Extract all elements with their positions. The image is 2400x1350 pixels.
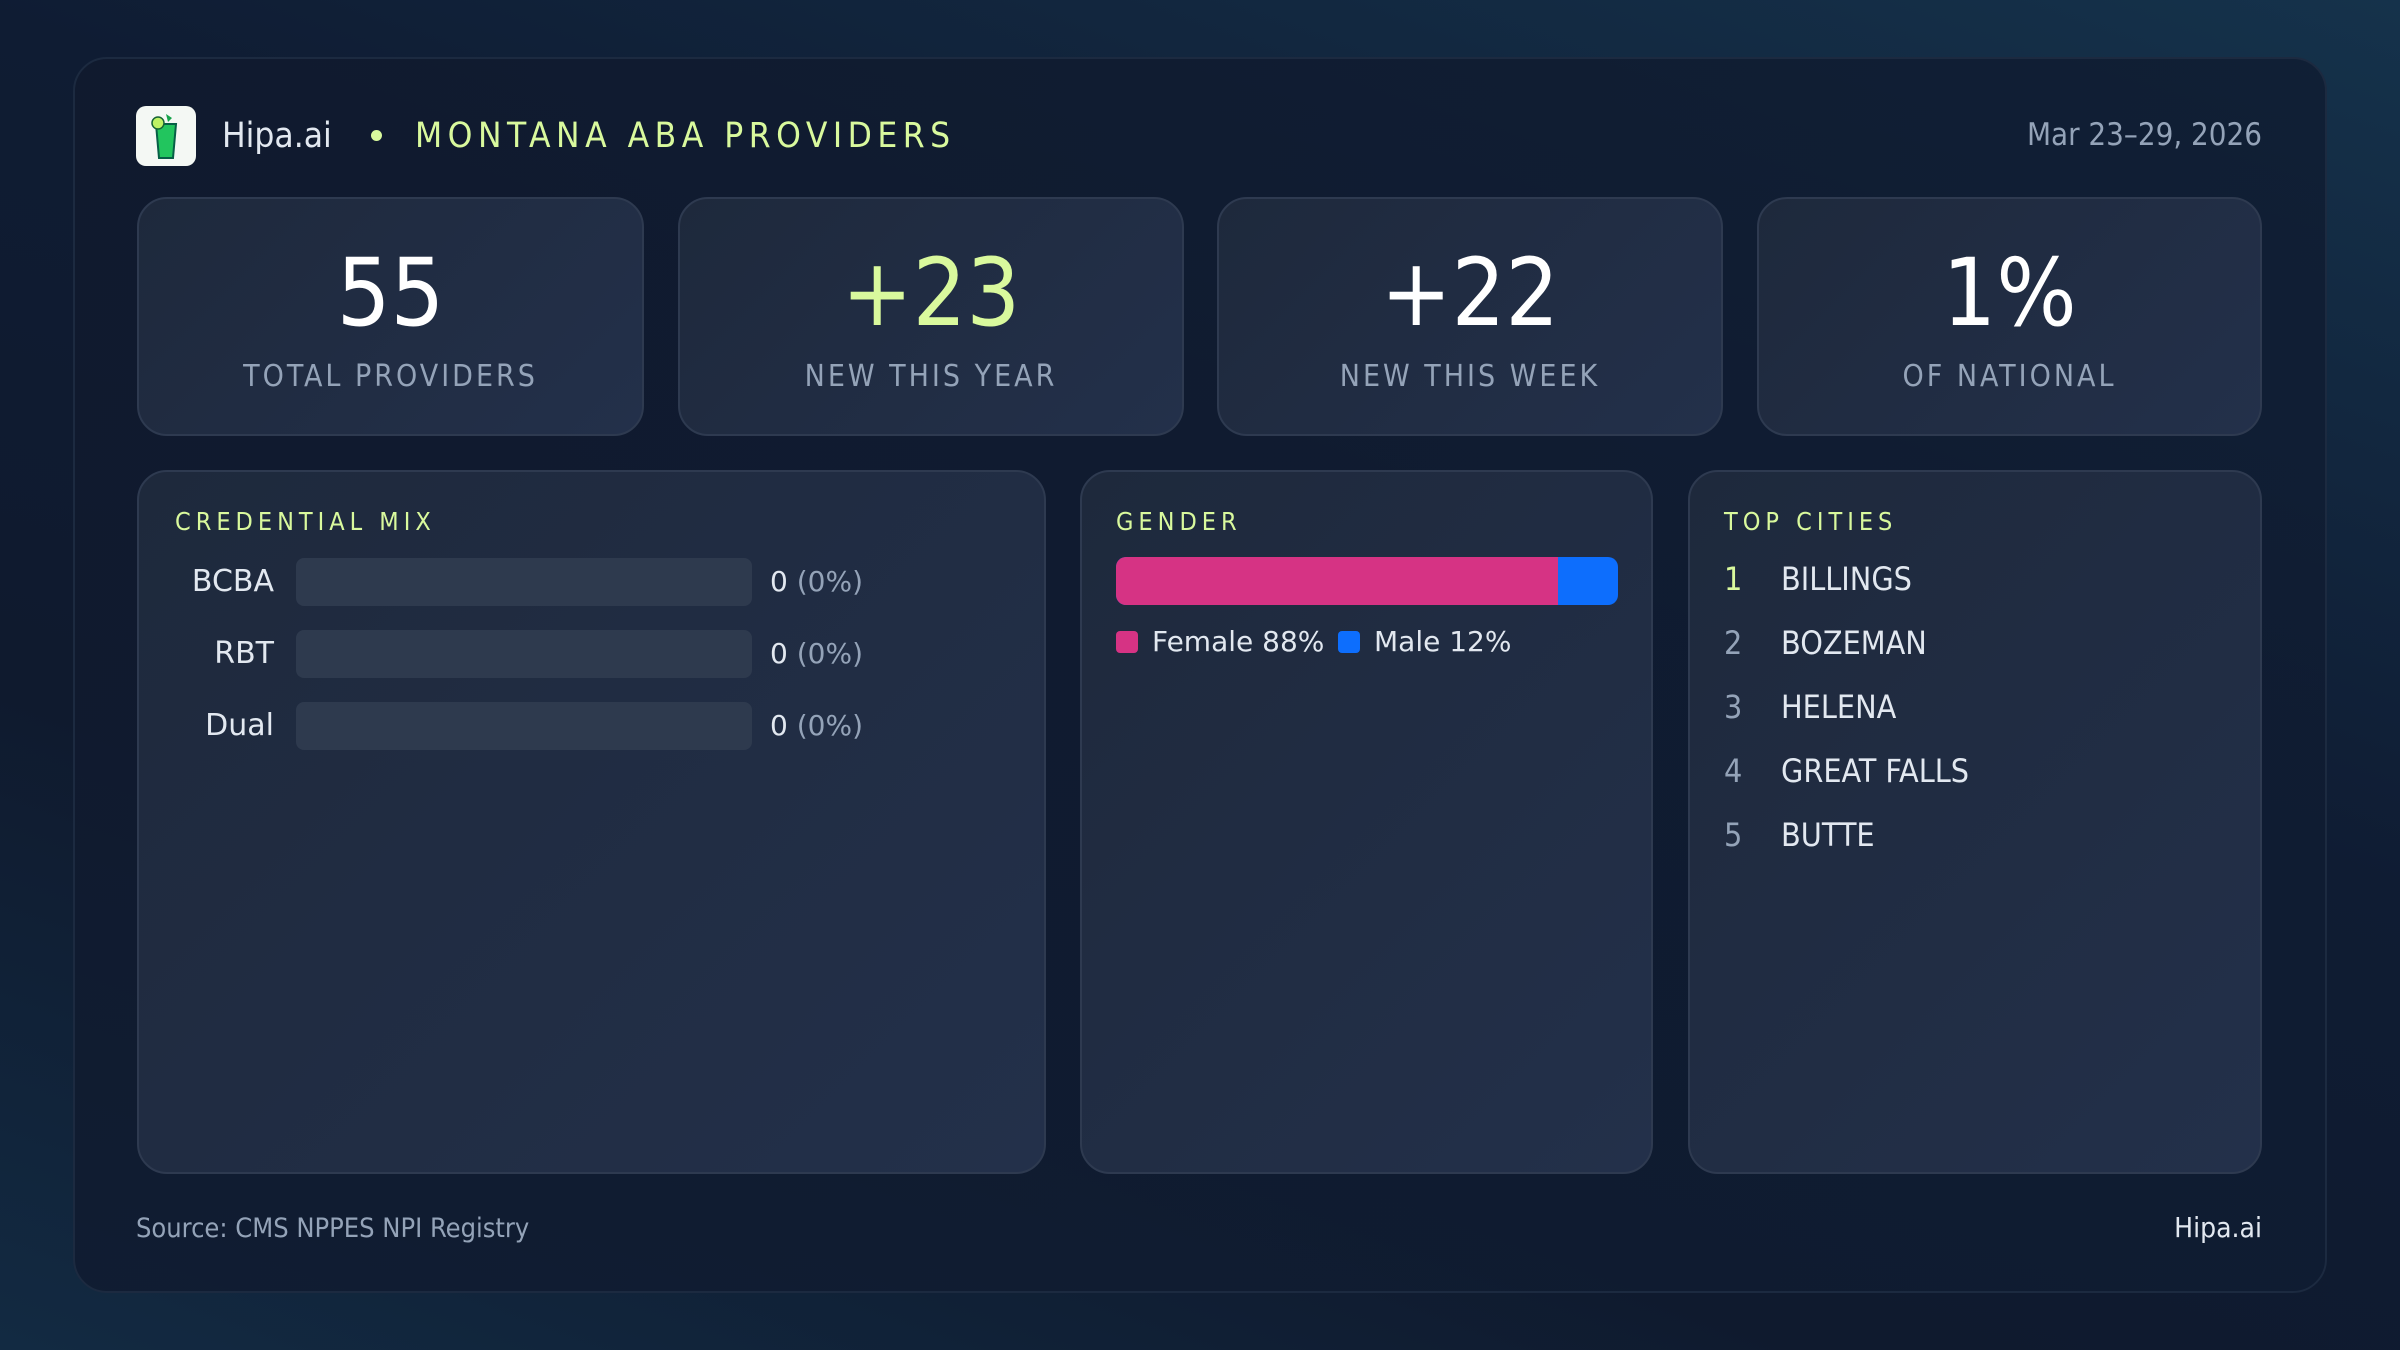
stat card: new this week: [1217, 197, 1723, 436]
bullet dot: [371, 130, 382, 141]
panel: gender: [1080, 470, 1653, 1174]
stat card: of national: [1757, 197, 2262, 436]
stat card: new this week: NEW THIS WEEK: [1340, 359, 1600, 394]
stat card: total providers: TOTAL PROVIDERS: [243, 359, 538, 394]
city list: 3: [1724, 688, 1742, 726]
stat card: new this year: [678, 197, 1184, 436]
date: Mar 23–29, 2026: [2027, 117, 2262, 153]
bar row: Dual: [205, 702, 863, 750]
city list: [1724, 560, 1969, 854]
panel: top cities: [1688, 470, 2262, 1174]
heading: top cities: TOP CITIES: [1724, 507, 1897, 536]
bar row: RBT: [214, 630, 863, 678]
city list: 5: [1724, 816, 1742, 854]
stat card: of national: OF NATIONAL: [1902, 359, 2116, 394]
city list: BUTTE: [1781, 816, 1875, 854]
stat card: new this year: NEW THIS YEAR: [805, 359, 1057, 394]
footer: brand: Hipa.ai: [2174, 1211, 2262, 1244]
bar row: BCBA: 0 (0%): [770, 565, 863, 598]
city list: GREAT FALLS: [1781, 752, 1969, 790]
legend: female: Female 88%: [1152, 625, 1324, 658]
stat card: of national: 1%: [1942, 239, 2077, 348]
city list: BOZEMAN: [1781, 624, 1927, 662]
city list: 2: [1724, 624, 1742, 662]
legend: male: Male 12%: [1374, 625, 1511, 658]
stat card: new this week: +22: [1381, 239, 1559, 348]
bar row: Dual: 0 (0%): [770, 709, 863, 742]
panel: credential mix: [137, 470, 1046, 1174]
stat card: total providers: 55: [337, 239, 444, 348]
heading: gender: GENDER: [1116, 507, 1242, 536]
bar row: RBT: 0 (0%): [770, 637, 863, 670]
bar row: BCBA: [192, 558, 863, 606]
footer: source: Source: CMS NPPES NPI Registry: [136, 1213, 529, 1244]
title: MONTANA ABA PROVIDERS: [415, 116, 956, 156]
bar row: RBT: RBT: [214, 636, 274, 671]
brand text: Hipa.ai: [222, 116, 332, 156]
bar row: Dual: Dual: [205, 708, 274, 743]
bar row: BCBA: BCBA: [192, 564, 274, 599]
stat card: total providers: [137, 197, 644, 436]
city list: HELENA: [1781, 688, 1896, 726]
city list: 4: [1724, 752, 1742, 790]
heading: credential mix: CREDENTIAL MIX: [175, 507, 436, 536]
icon: logo: [136, 106, 196, 166]
stacked bar: gender: [1116, 557, 1618, 605]
stat card: new this year: +23: [842, 239, 1020, 348]
city list: BILLINGS: [1781, 560, 1912, 598]
city list: 1: [1724, 560, 1742, 598]
